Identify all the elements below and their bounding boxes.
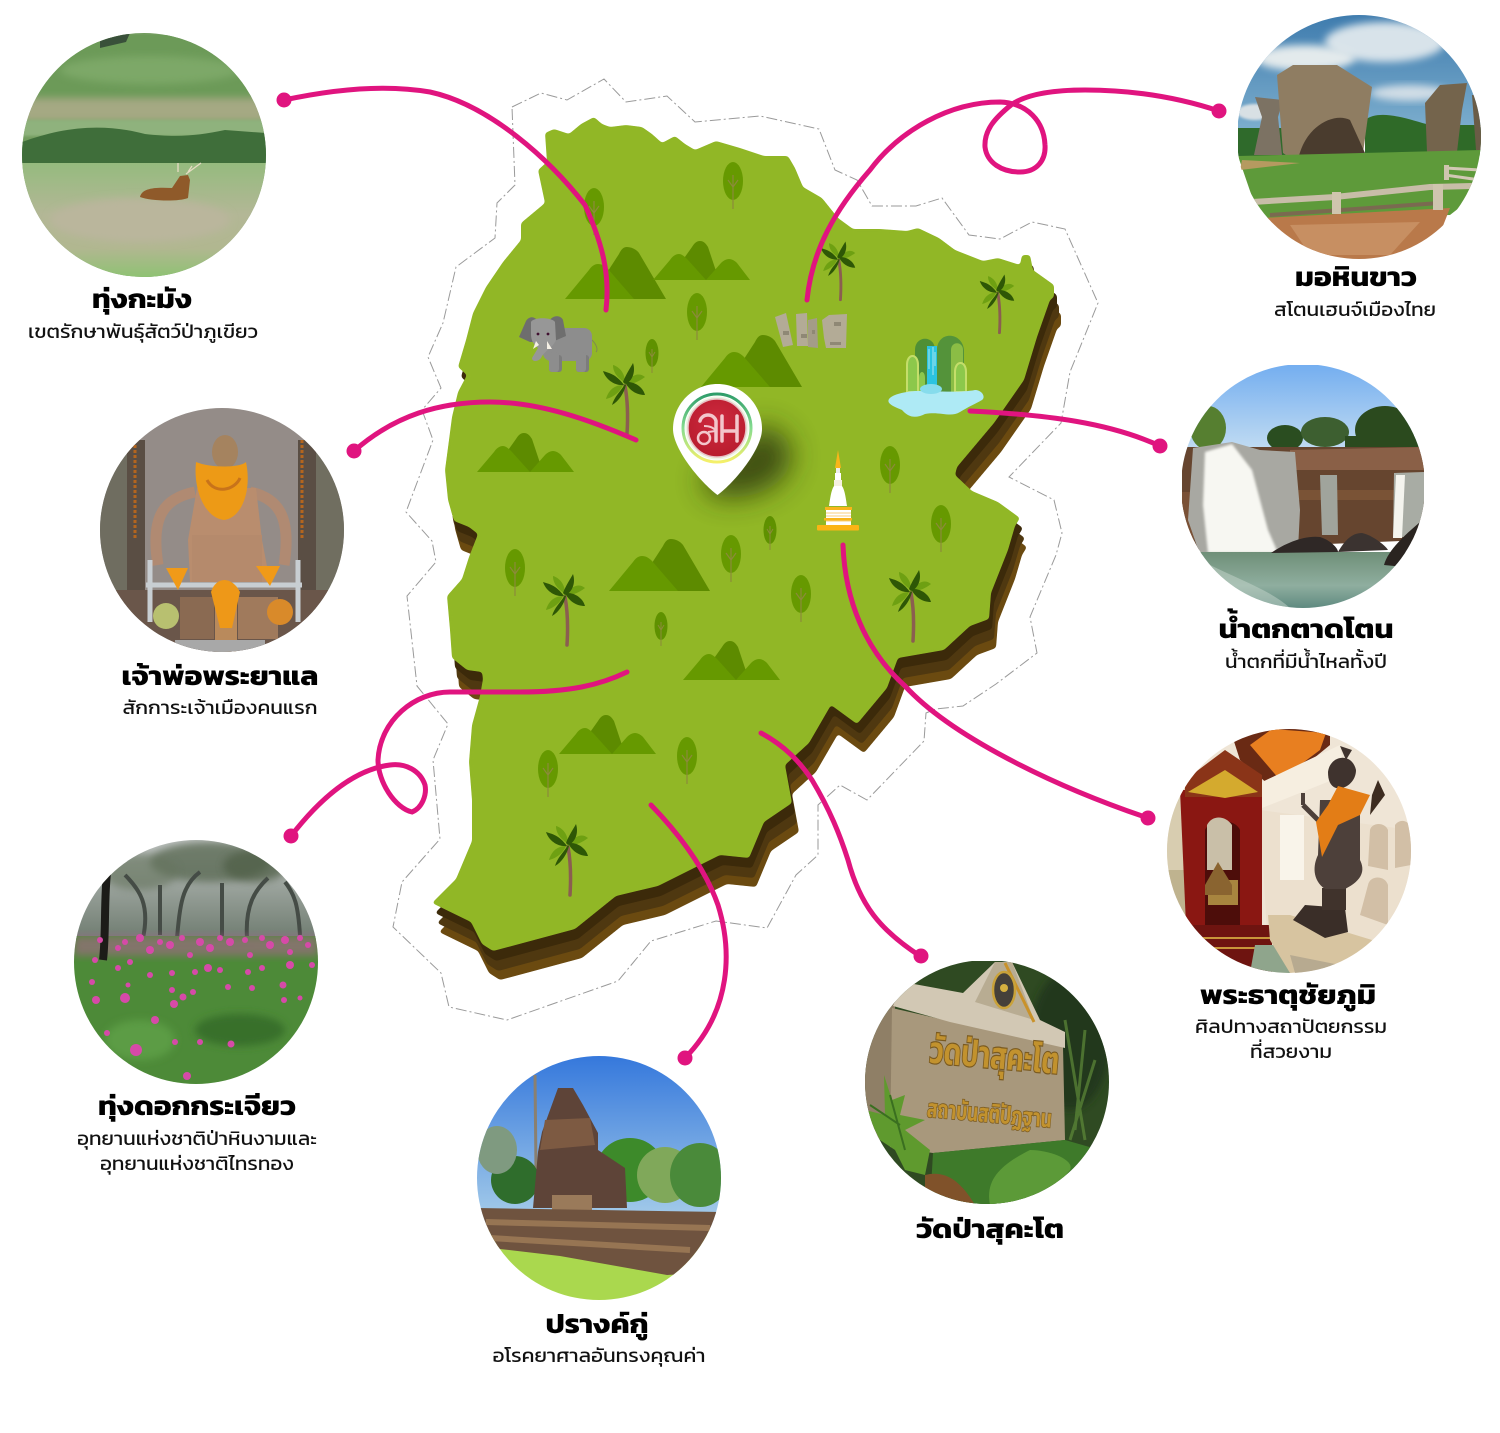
caption: เขตรักษาพันธุ์สัตว์ป่าภูเขียว (28, 322, 258, 344)
photo: waterfall (1182, 365, 1430, 608)
caption: อุทยานแห่งชาติไทรทอง (100, 1154, 294, 1175)
heading: วัดป่าสุคะโต (916, 1214, 1064, 1245)
sign lettering: วัดป่าสุคะโต (928, 1028, 1061, 1084)
connector: ปรางค์กู่ (651, 805, 726, 1058)
panel: ปรางค์กู่ (477, 1056, 730, 1367)
connector: ทุ่งดอกกระเจียว (291, 672, 627, 836)
photo: stone prang (477, 1056, 730, 1300)
heading: น้ำตกตาดโตน (1218, 607, 1394, 644)
photo: deer in meadow (22, 33, 266, 277)
caption: ที่สวยงาม (1250, 1038, 1332, 1063)
caption (1195, 1017, 1387, 1063)
caption: ศิลปทางสถาปัตยกรรม (1195, 1017, 1387, 1038)
map palm trees (543, 242, 1014, 895)
caption: อโรคยาศาลอันทรงคุณค่า (492, 1346, 706, 1367)
caption: สโตนเฮนจ์เมืองไทย (1274, 300, 1436, 321)
panel: มอหินขาว (1237, 15, 1482, 321)
sign lettering (923, 1028, 1061, 1134)
connector end dots (276, 92, 1226, 1066)
map of province (432, 117, 1061, 980)
icon: stone pillars (775, 313, 847, 348)
connector: ทุ่งกะมัง (284, 88, 607, 310)
heading: พระธาตุชัยภูมิ (1200, 980, 1376, 1011)
panel: ทุ่งกะมัง (22, 33, 266, 344)
heading: เจ้าพ่อพระยาแล (122, 661, 318, 691)
map trees (505, 162, 951, 797)
panel: วัดป่าสุคะโต (865, 961, 1110, 1245)
photo: siam tulip field (74, 840, 318, 1084)
panel: ทุ่งดอกกระเจียว (74, 840, 318, 1175)
photo: stone pillars (1237, 15, 1482, 259)
pin logo (683, 394, 751, 462)
panel: เจ้าพ่อพระยาแล (100, 408, 344, 719)
icon: stupa (817, 450, 859, 530)
photo: statue with marigolds (100, 408, 344, 652)
connector: น้ำตกตาดโตน (970, 411, 1160, 446)
heading: ทุ่งดอกกระเจียว (98, 1091, 296, 1122)
photo: temple sign (865, 961, 1110, 1205)
heading: มอหินขาว (1295, 262, 1417, 292)
heading: ปรางค์กู่ (546, 1309, 648, 1340)
location pin (673, 384, 791, 498)
caption: สักการะเจ้าเมืองคนแรก (122, 698, 318, 719)
pin body (673, 384, 762, 495)
icon: waterfall (888, 336, 984, 417)
map mountains (477, 241, 802, 754)
connector: มอหินขาว (807, 90, 1219, 300)
connector: พระธาตุชัยภูมิ (843, 545, 1148, 818)
pin shadow (700, 425, 791, 498)
heading: ทุ่งกะมัง (92, 284, 192, 315)
panel: พระธาตุชัยภูมิ (1167, 729, 1411, 1063)
connector lines (284, 88, 1219, 1058)
map boundary dashed outline (393, 79, 1098, 1020)
caption: น้ำตกที่มีน้ำไหลทั้งปี (1225, 646, 1387, 673)
photo: temple with standing buddha (1167, 729, 1411, 973)
panel: น้ำตกตาดโตน (1182, 365, 1430, 673)
caption (77, 1129, 317, 1175)
map top surface (432, 117, 1054, 951)
icon: elephant (519, 316, 597, 372)
map side layers (435, 127, 1061, 980)
connector: เจ้าพ่อพระยาแล (354, 402, 636, 451)
sign lettering: สถาบันสติปัฏฐาน (926, 1093, 1053, 1134)
connector: วัดป่าสุคะโต (761, 733, 920, 956)
caption: อุทยานแห่งชาติป่าหินงามและ (77, 1129, 317, 1150)
